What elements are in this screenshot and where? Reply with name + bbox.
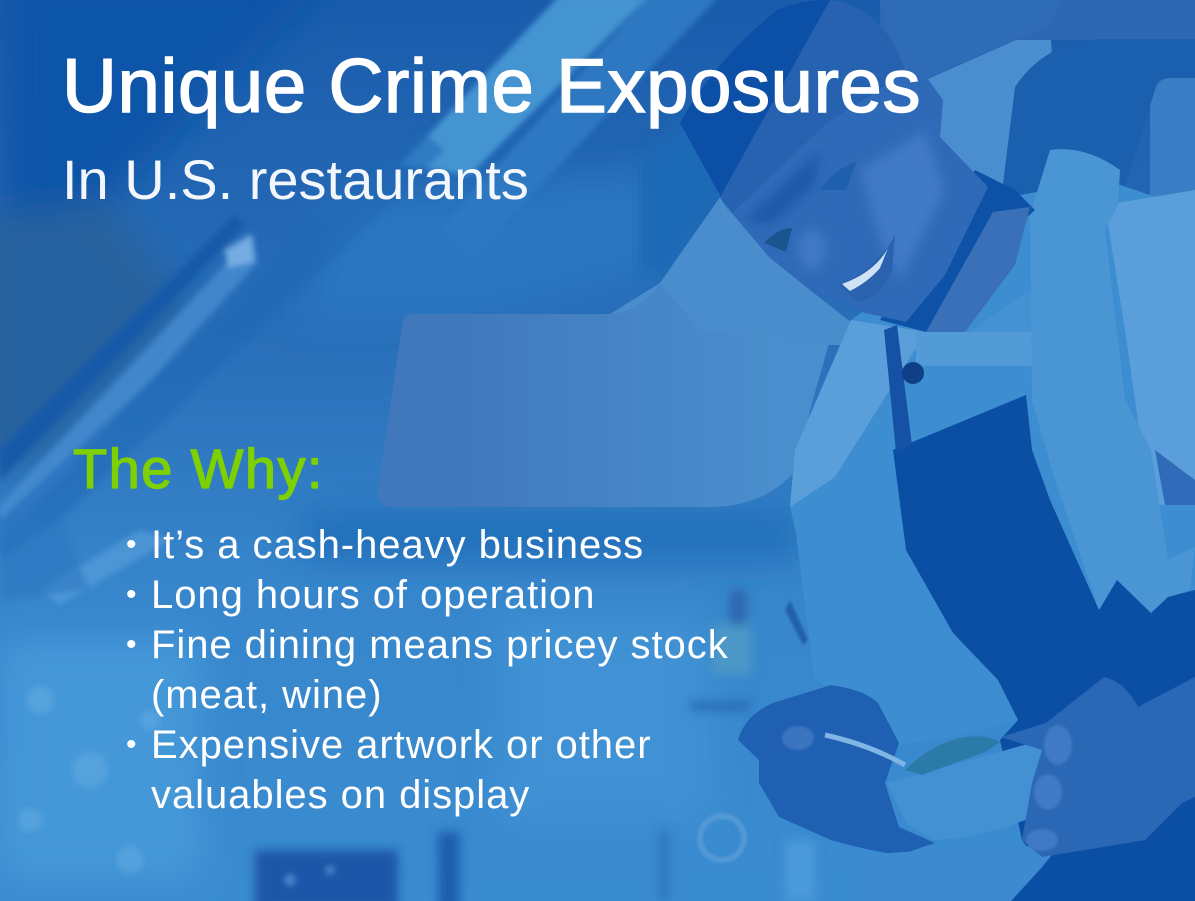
bullet list of reasons: • [126, 728, 137, 761]
chef hat [680, 0, 905, 213]
table below bowl [860, 845, 1060, 901]
bullet list of reasons [126, 149, 1113, 817]
heading: The Why: The Why: [73, 437, 324, 500]
bullet list of reasons: • [126, 528, 137, 561]
light area below the face [610, 197, 880, 345]
window behind chef, top right [880, 25, 1062, 210]
bullet list of reasons: valuables on display [151, 773, 530, 817]
ceiling beams and light strips [0, 0, 720, 605]
towel over shoulder [1030, 149, 1195, 613]
translucent logo rectangle over background [378, 283, 830, 507]
subtitle: In U.S. restaurants [62, 148, 529, 211]
darker logo band, top right [1000, 39, 1195, 208]
facial features [764, 162, 895, 302]
jacket button [902, 362, 924, 384]
title: Unique Crime Exposures [62, 44, 921, 129]
right hand and arm [1001, 677, 1195, 857]
neck [880, 170, 1035, 332]
bullet list of reasons: • [126, 578, 137, 611]
bullet list of reasons: Expensive artwork or other [151, 723, 651, 767]
bowl [887, 740, 1049, 840]
bullet list of reasons: Fine dining means pricey stock [151, 623, 729, 667]
apron [893, 395, 1195, 901]
food in bowl [905, 736, 1000, 775]
jacket body [790, 180, 1195, 745]
face [732, 67, 988, 322]
bullet list of reasons: It’s a cash-heavy business [151, 523, 644, 567]
bullet list of reasons: • [126, 628, 137, 661]
left hand with spoon [738, 685, 935, 855]
bokeh lights [18, 686, 335, 886]
bullet list of reasons: Long hours of operation [151, 573, 595, 617]
bullet list of reasons: (meat, wine) [151, 673, 382, 717]
blurred restaurant interior tones [0, 0, 800, 880]
blurred shelves and objects [255, 590, 815, 901]
soft tone left of the hat [640, 110, 730, 275]
